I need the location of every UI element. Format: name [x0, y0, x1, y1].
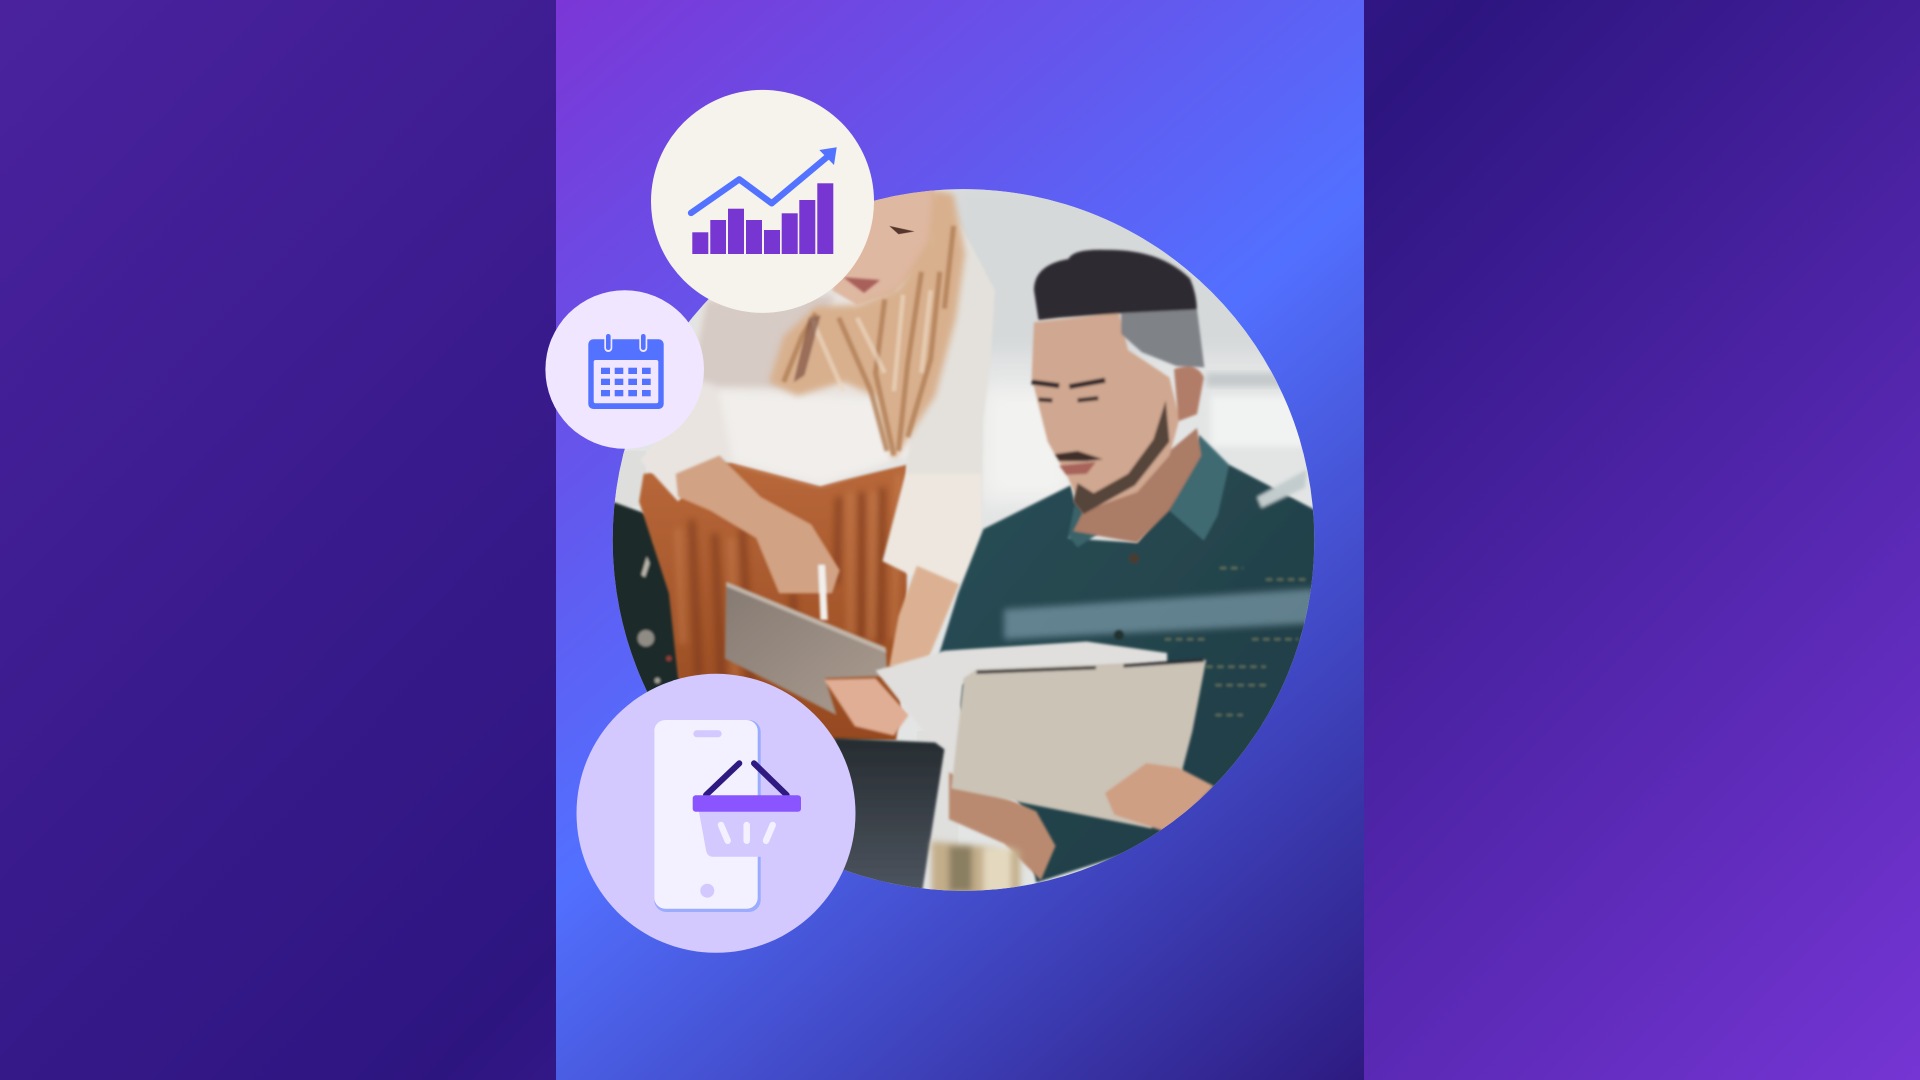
cup — [932, 841, 1020, 896]
icon: growth chart badge — [651, 90, 874, 313]
folder — [951, 660, 1206, 828]
woman: blouse — [640, 212, 995, 596]
center gradient panel — [556, 0, 1364, 1080]
bar chart — [692, 183, 833, 254]
man: shirt — [935, 435, 1316, 883]
man: hand holding folder — [1105, 763, 1214, 833]
trend arrow — [691, 147, 837, 213]
tablet — [725, 582, 909, 736]
phone — [654, 720, 761, 912]
photo: two colleagues reviewing documents — [600, 180, 1335, 915]
woman: skirt — [639, 462, 907, 740]
loose papers — [875, 640, 1169, 731]
man: head — [1032, 250, 1204, 543]
man: lower hand — [949, 772, 1056, 880]
icon: calendar badge — [545, 290, 704, 449]
photo backdrop — [600, 180, 1335, 915]
illustration — [545, 90, 1314, 953]
laptop — [834, 738, 944, 896]
woman: arms and hands — [676, 456, 959, 669]
icon: mobile shopping basket badge — [576, 674, 856, 953]
woman: hair and face — [769, 187, 965, 460]
person at left edge — [609, 501, 681, 703]
basket — [693, 763, 801, 857]
